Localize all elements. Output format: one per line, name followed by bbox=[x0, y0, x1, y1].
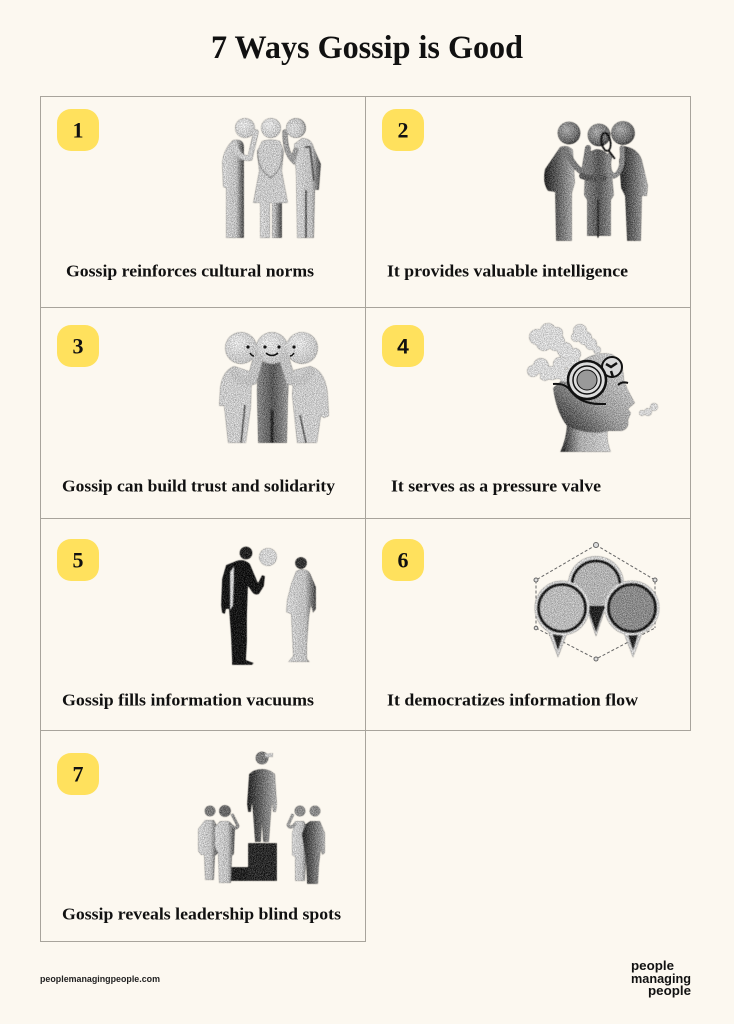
logo bbox=[631, 959, 691, 998]
icon: three map pin speech bubbles bbox=[534, 556, 660, 658]
label: It provides valuable intelligence bbox=[387, 262, 628, 280]
logo: people bbox=[631, 959, 674, 973]
panel: 5 information vacuums bbox=[40, 518, 366, 730]
panel: 4 pressure valve bbox=[366, 308, 690, 518]
badge 7 bbox=[57, 753, 99, 795]
badge 6 bbox=[382, 539, 424, 581]
label: Gossip reinforces cultural norms bbox=[66, 262, 314, 280]
network lines bbox=[536, 545, 655, 659]
badge 4: 4 bbox=[397, 336, 409, 358]
badge 5 bbox=[57, 539, 99, 581]
panel: 2 valuable intelligence bbox=[366, 96, 690, 308]
label: Gossip reveals leadership blind spots bbox=[62, 904, 341, 924]
label: Gossip fills information vacuums bbox=[62, 690, 314, 710]
badge 7: 7 bbox=[72, 762, 84, 786]
network nodes bbox=[534, 542, 657, 661]
badge 1 bbox=[57, 109, 99, 151]
label: It democratizes information flow bbox=[387, 690, 639, 710]
label: Gossip can build trust and solidarity bbox=[62, 476, 336, 496]
badge 6: 6 bbox=[398, 548, 408, 572]
panel: 1 cultural norms bbox=[40, 96, 366, 308]
badge 3: 3 bbox=[72, 334, 84, 358]
panel: 3 trust and solidarity bbox=[40, 308, 366, 518]
badge 2: 2 bbox=[398, 118, 408, 142]
title: 7 Ways Gossip is Good bbox=[211, 30, 523, 66]
icon: two men talking with speech bubble bbox=[221, 546, 316, 665]
badge 1: 1 bbox=[72, 118, 84, 142]
valve rings bbox=[553, 357, 628, 404]
badge 2 bbox=[382, 109, 424, 151]
badge 5: 5 bbox=[72, 548, 84, 572]
icon: blindfolded leader on podium with whisperers bbox=[198, 752, 325, 884]
icon: three people whispering bbox=[222, 118, 321, 238]
icon: three smiling figures whispering bbox=[219, 332, 329, 443]
faces bbox=[246, 345, 296, 356]
footer url: peoplemanagingpeople.com bbox=[40, 974, 160, 984]
panel: 7 leadership blind spots bbox=[40, 730, 366, 942]
icon: people with magnifying glass bbox=[544, 121, 648, 241]
logo: managing bbox=[631, 972, 691, 986]
badge 4 bbox=[382, 325, 424, 367]
label: It serves as a pressure valve bbox=[391, 476, 601, 496]
logo: people bbox=[648, 984, 691, 998]
icon: head with steam and valve bbox=[527, 323, 658, 452]
panel: 6 information flow bbox=[366, 518, 690, 730]
badge 3 bbox=[57, 325, 99, 367]
